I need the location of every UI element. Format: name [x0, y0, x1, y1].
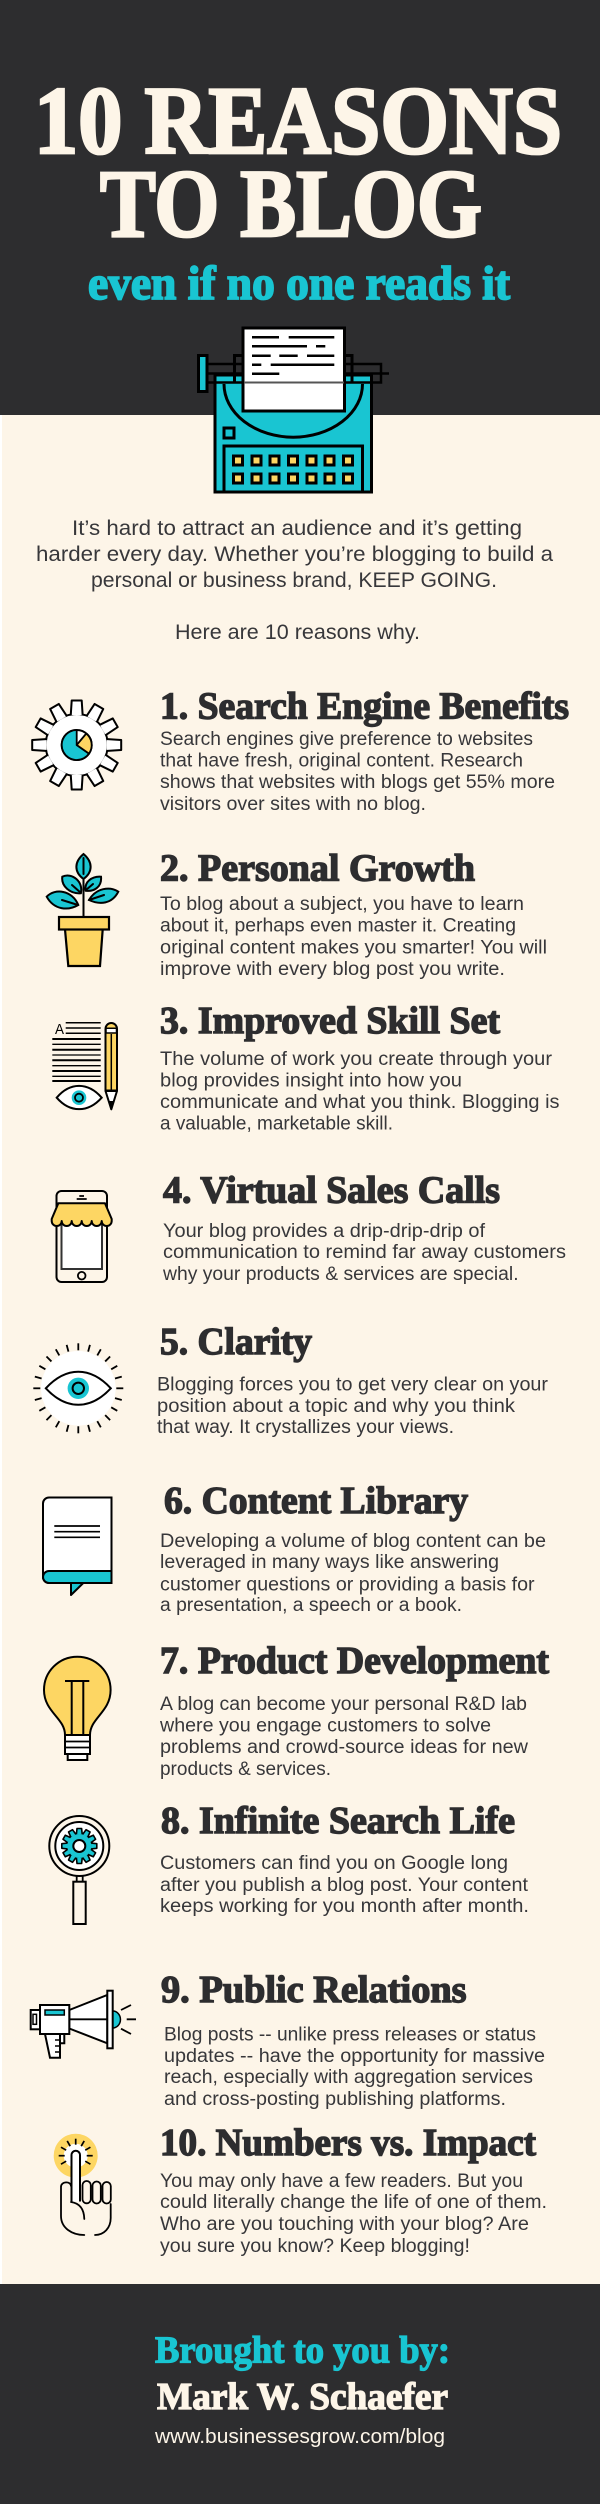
- text block: where you engage customers to solve: [159, 1716, 491, 1737]
- text block: Who are you touching with your blog? Are: [160, 2214, 529, 2235]
- intro text: harder every day. Whether you’re blogging to build a: [36, 542, 553, 566]
- icon: typewriter: [198, 328, 389, 492]
- text block: To blog about a subject, you have to learn: [160, 894, 524, 915]
- heading: 3. Improved Skill Set: [160, 1000, 500, 1042]
- text block: reach, especially with aggregation services: [164, 2067, 533, 2088]
- heading: 2. Personal Growth: [160, 848, 475, 890]
- text block: [159, 1694, 528, 1780]
- text block: shows that websites with blogs get 55% more: [160, 772, 555, 793]
- subtitle: even if no one reads it: [88, 257, 510, 310]
- text block: [157, 1375, 549, 1438]
- text block: leveraged in many ways like answering: [160, 1552, 499, 1573]
- panel: footer: [0, 2284, 600, 2504]
- text block: a valuable, marketable skill.: [160, 1113, 393, 1134]
- title: 10 REASONS: [34, 67, 562, 174]
- intro text: [36, 516, 553, 644]
- text block: updates -- have the opportunity for massive: [164, 2046, 545, 2067]
- text block: [160, 1531, 546, 1616]
- text block: [160, 1853, 529, 1917]
- title: [34, 67, 562, 257]
- title: TO BLOG: [100, 150, 482, 257]
- text block: Blogging forces you to get very clear on your: [157, 1375, 549, 1396]
- text block: A blog can become your personal R&D lab: [160, 1694, 527, 1715]
- panel: reason 2: [47, 848, 547, 980]
- text block: could literally change the life of one of them.: [160, 2192, 547, 2213]
- text block: [160, 2171, 547, 2257]
- panel: reason 3: [52, 1000, 560, 1134]
- text block: keeps working for you month after month.: [160, 1896, 529, 1917]
- text block: blog provides insight into how you: [160, 1071, 462, 1092]
- text block: position about a topic and why you think: [157, 1396, 516, 1417]
- text block: Search engines give preference to websites: [160, 729, 533, 750]
- icon: potted plant: [47, 854, 118, 966]
- text block: you sure you know? Keep blogging!: [160, 2236, 470, 2257]
- heading: 1. Search Engine Benefits: [160, 685, 569, 727]
- heading: 10. Numbers vs. Impact: [160, 2122, 536, 2164]
- text block: Customers can find you on Google long: [160, 1853, 508, 1874]
- panel: reason 9: [31, 1969, 545, 2110]
- text block: original content makes you smarter! You will: [160, 937, 547, 958]
- footer author name: Mark W. Schaefer: [157, 2376, 448, 2418]
- text block: [164, 2025, 545, 2110]
- panel: reason 5: [33, 1321, 549, 1438]
- text block: The volume of work you create through your: [160, 1049, 553, 1070]
- text block: improve with every blog post you write.: [160, 959, 505, 980]
- text block: problems and crowd-source ideas for new: [160, 1737, 528, 1758]
- text block: after you publish a blog post. Your content: [160, 1875, 529, 1896]
- icon: hand with tap: [54, 2134, 111, 2235]
- text block: Developing a volume of blog content can be: [160, 1531, 546, 1552]
- heading: 7. Product Development: [160, 1640, 549, 1682]
- panel: reason 6: [43, 1480, 546, 1616]
- text block: that way. It crystallizes your views.: [157, 1417, 454, 1438]
- icon: eye with rays: [33, 1343, 123, 1433]
- heading: 5. Clarity: [160, 1321, 312, 1363]
- text block: customer questions or providing a basis for: [160, 1575, 535, 1596]
- panel: reason 10: [54, 2122, 547, 2257]
- text block: products & services.: [160, 1759, 331, 1780]
- icon: book with bookmark: [43, 1498, 112, 1595]
- text block: [160, 729, 555, 815]
- text block: [162, 1221, 566, 1285]
- text block: that have fresh, original content. Research: [160, 751, 523, 772]
- icon: gear with pie chart: [32, 700, 121, 790]
- text block: [160, 894, 547, 980]
- heading: 4. Virtual Sales Calls: [163, 1170, 500, 1212]
- intro text: personal or business brand, KEEP GOING.: [91, 568, 497, 592]
- text block: a presentation, a speech or a book.: [160, 1595, 462, 1616]
- icon: document, eye and pencil: A: [55, 1021, 64, 1038]
- text block: Your blog provides a drip-drip-drip of: [163, 1221, 486, 1242]
- text block: [160, 1049, 560, 1134]
- footer url: www.businessesgrow.com/blog: [154, 2426, 445, 2448]
- panel: header: [0, 0, 600, 415]
- text block: Blog posts -- unlike press releases or status: [164, 2025, 536, 2046]
- panel: reason 7: [44, 1640, 549, 1780]
- text block: visitors over sites with no blog.: [160, 794, 426, 815]
- panel: reason 1: [32, 685, 569, 815]
- text block: communicate and what you think. Blogging is: [160, 1092, 560, 1113]
- intro text: Here are 10 reasons why.: [175, 620, 420, 644]
- icon: smartphone storefront: [52, 1191, 112, 1282]
- icon: magnifying glass with gear: [49, 1816, 109, 1924]
- icon: light bulb: [44, 1657, 111, 1760]
- icon: megaphone: [31, 1991, 136, 2058]
- panel: reason 8: [49, 1800, 529, 1924]
- footer heading: brought to you by: Brought to you by:: [155, 2330, 450, 2372]
- text block: about it, perhaps even master it. Creating: [160, 916, 516, 937]
- text block: and cross-posting publishing platforms.: [164, 2089, 506, 2110]
- panel: reason 4: [52, 1170, 566, 1285]
- intro text: It’s hard to attract an audience and it’s getting: [72, 516, 522, 540]
- text block: why your products & services are special.: [162, 1264, 519, 1285]
- text block: You may only have a few readers. But you: [160, 2171, 523, 2192]
- icon: document, eye and pencil: [52, 1021, 117, 1109]
- heading: 8. Infinite Search Life: [161, 1800, 515, 1842]
- heading: 6. Content Library: [164, 1480, 468, 1522]
- text block: communication to remind far away customers: [163, 1242, 566, 1263]
- heading: 9. Public Relations: [161, 1969, 467, 2011]
